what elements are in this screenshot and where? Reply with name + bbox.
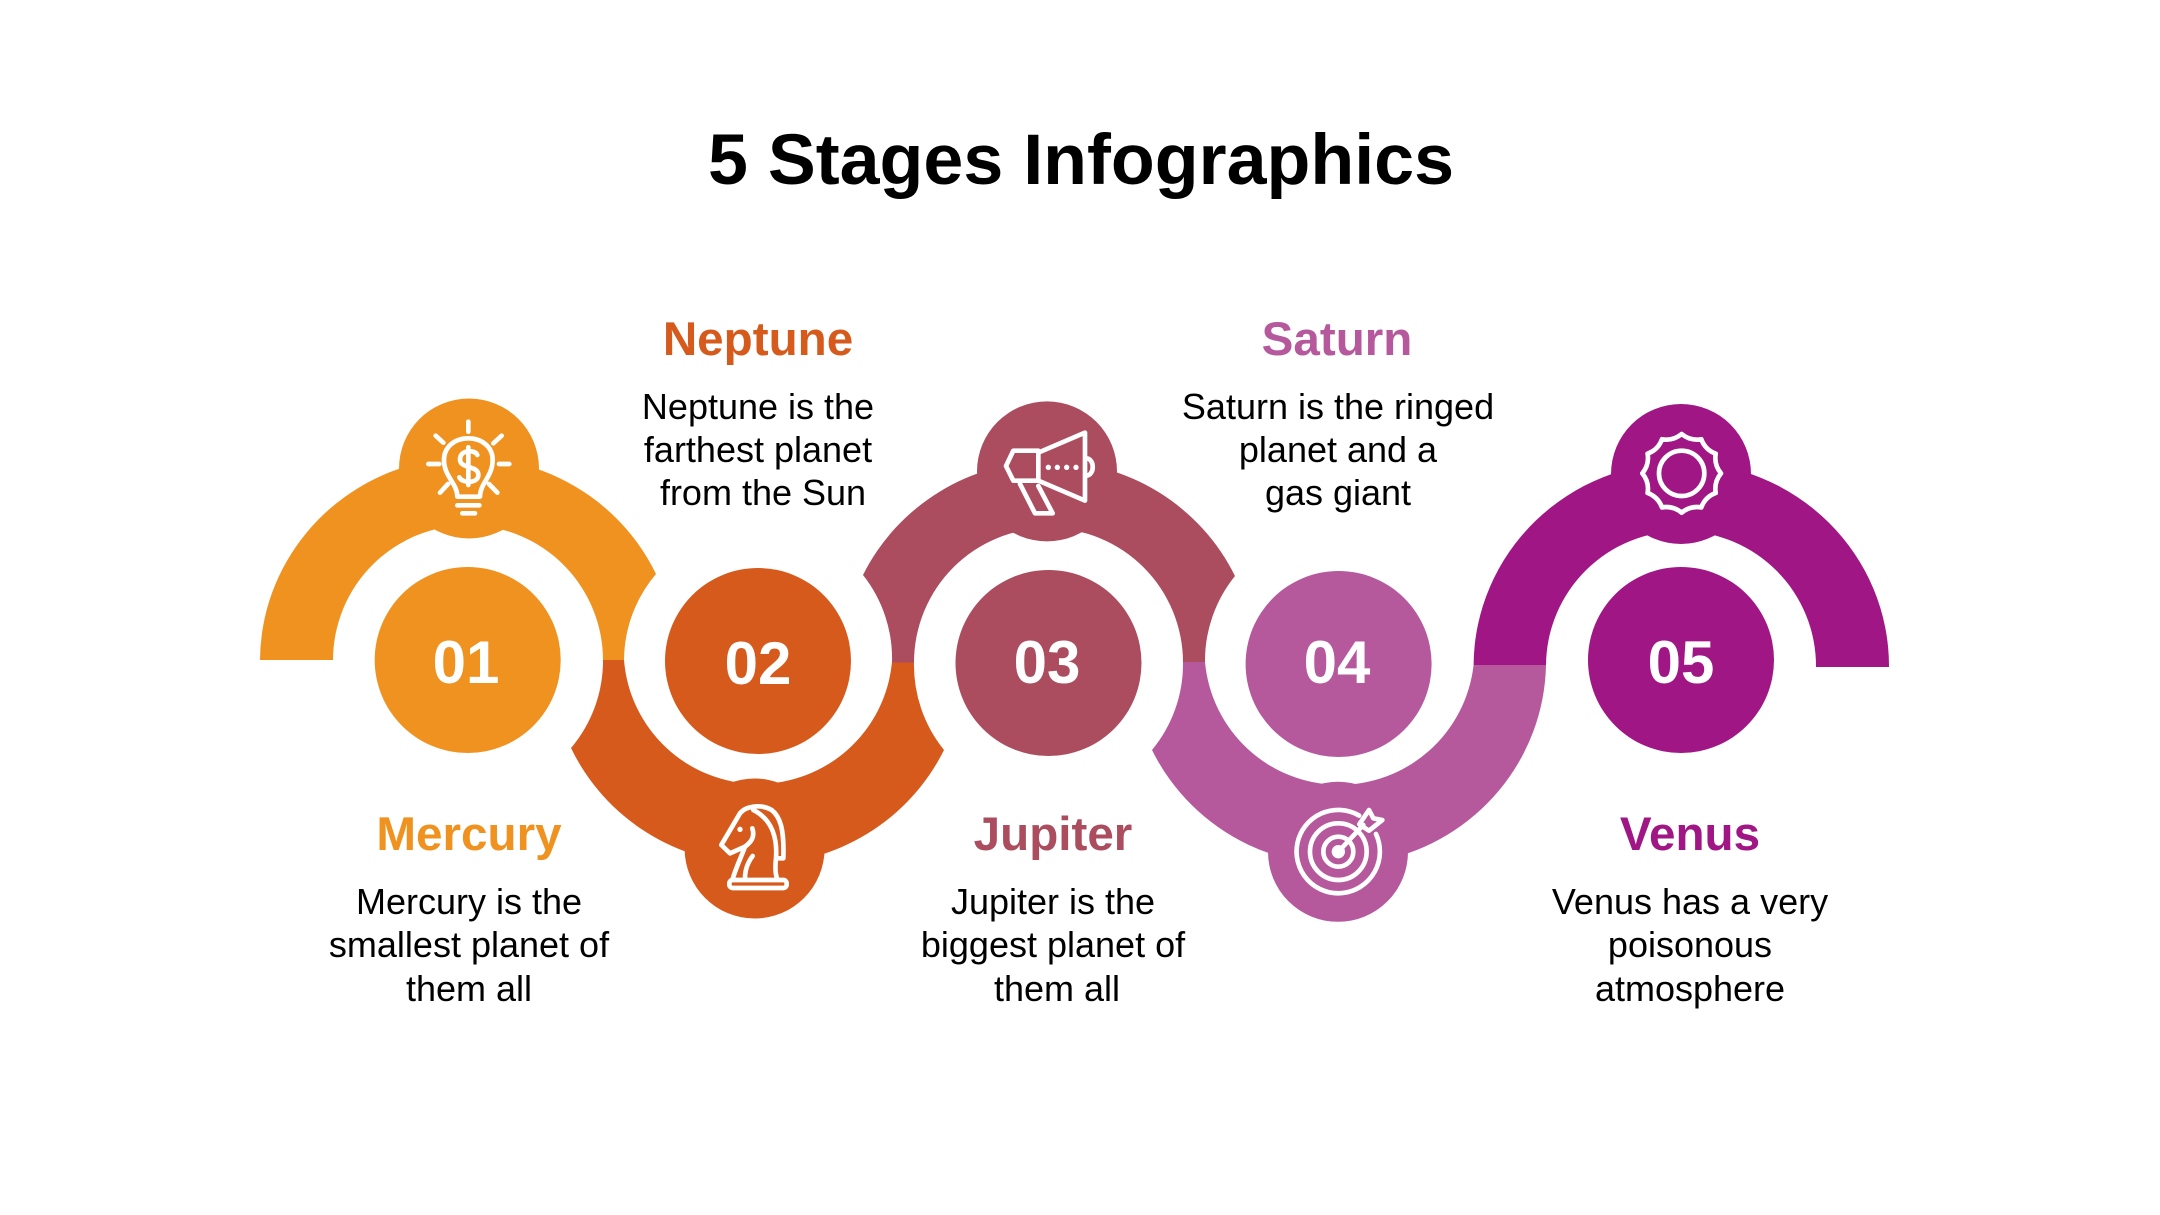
text block: Saturn description: planet and a bbox=[1239, 429, 1438, 470]
heading: Mercury: Mercury bbox=[376, 808, 562, 861]
icon: megaphone bbox=[1006, 433, 1093, 513]
text block: Neptune description bbox=[642, 386, 874, 513]
icon: badge ring bbox=[1642, 434, 1721, 513]
heading: Venus: Venus bbox=[1620, 808, 1760, 861]
text block: Saturn description bbox=[1182, 386, 1494, 513]
number circle: 05 bbox=[1588, 567, 1774, 753]
arc: stage 1 bbox=[260, 457, 656, 660]
text block: Venus description bbox=[1552, 881, 1828, 1009]
text block: Saturn description: Saturn is the ringed bbox=[1182, 386, 1494, 427]
icon badge: stage 5 bbox=[1611, 404, 1751, 544]
panel: stage 5 Venus bbox=[1474, 404, 1889, 1009]
icon badge: stage 1 bbox=[399, 398, 539, 538]
text block: Jupiter description: them all bbox=[994, 968, 1120, 1009]
text block: Jupiter description bbox=[921, 881, 1186, 1009]
text block: Neptune description: Neptune is the bbox=[642, 386, 874, 427]
number: 04: 04 bbox=[1304, 629, 1371, 696]
text block: Venus description: poisonous bbox=[1608, 924, 1772, 965]
arc: stage 4 bbox=[1152, 662, 1546, 865]
number: 03: 03 bbox=[1014, 629, 1080, 696]
text block: Saturn description: gas giant bbox=[1265, 472, 1411, 513]
title: 5 Stages Infographics bbox=[708, 120, 1454, 200]
text block: Venus description: Venus has a very bbox=[1552, 881, 1828, 922]
number: 01: 01 bbox=[433, 629, 499, 696]
text block: Mercury description: Mercury is the bbox=[356, 881, 582, 922]
panel: stage 2 Neptune bbox=[571, 313, 944, 918]
number circle: 03 bbox=[956, 570, 1142, 756]
text block: Mercury description: them all bbox=[406, 968, 532, 1009]
text block: Neptune description: farthest planet bbox=[644, 429, 872, 470]
icon: light bulb with dollar bbox=[428, 422, 509, 513]
number: 05: 05 bbox=[1648, 629, 1714, 696]
heading: Neptune: Neptune bbox=[663, 313, 853, 366]
icon badge: stage 3 bbox=[977, 401, 1117, 541]
text block: Jupiter description: Jupiter is the bbox=[951, 881, 1155, 922]
text block: Mercury description bbox=[329, 881, 610, 1009]
text block: Venus description: atmosphere bbox=[1595, 968, 1785, 1009]
number circle: 02 bbox=[665, 568, 851, 754]
heading: Jupiter: Jupiter bbox=[974, 808, 1132, 861]
icon badge: stage 2 bbox=[685, 778, 825, 918]
icon badge: stage 4 bbox=[1268, 782, 1408, 922]
icon: target with arrow bbox=[1297, 810, 1382, 893]
icon: chess knight bbox=[721, 806, 787, 888]
panel: stage 4 Saturn bbox=[1152, 313, 1546, 922]
panel: stage 1 Mercury bbox=[260, 398, 656, 1009]
arc: stage 5 bbox=[1474, 462, 1889, 667]
text block: Mercury description: smallest planet of bbox=[329, 924, 610, 965]
arc: stage 2 bbox=[571, 660, 944, 864]
panel: stage 3 Jupiter bbox=[863, 401, 1235, 1009]
heading: Saturn: Saturn bbox=[1262, 313, 1412, 366]
text block: Jupiter description: biggest planet of bbox=[921, 924, 1186, 965]
arc: stage 3 bbox=[863, 461, 1235, 662]
number circle: 01 bbox=[375, 567, 561, 753]
text block: Neptune description: from the Sun bbox=[660, 472, 866, 513]
number circle: 04 bbox=[1246, 571, 1432, 757]
number: 02: 02 bbox=[725, 630, 791, 697]
